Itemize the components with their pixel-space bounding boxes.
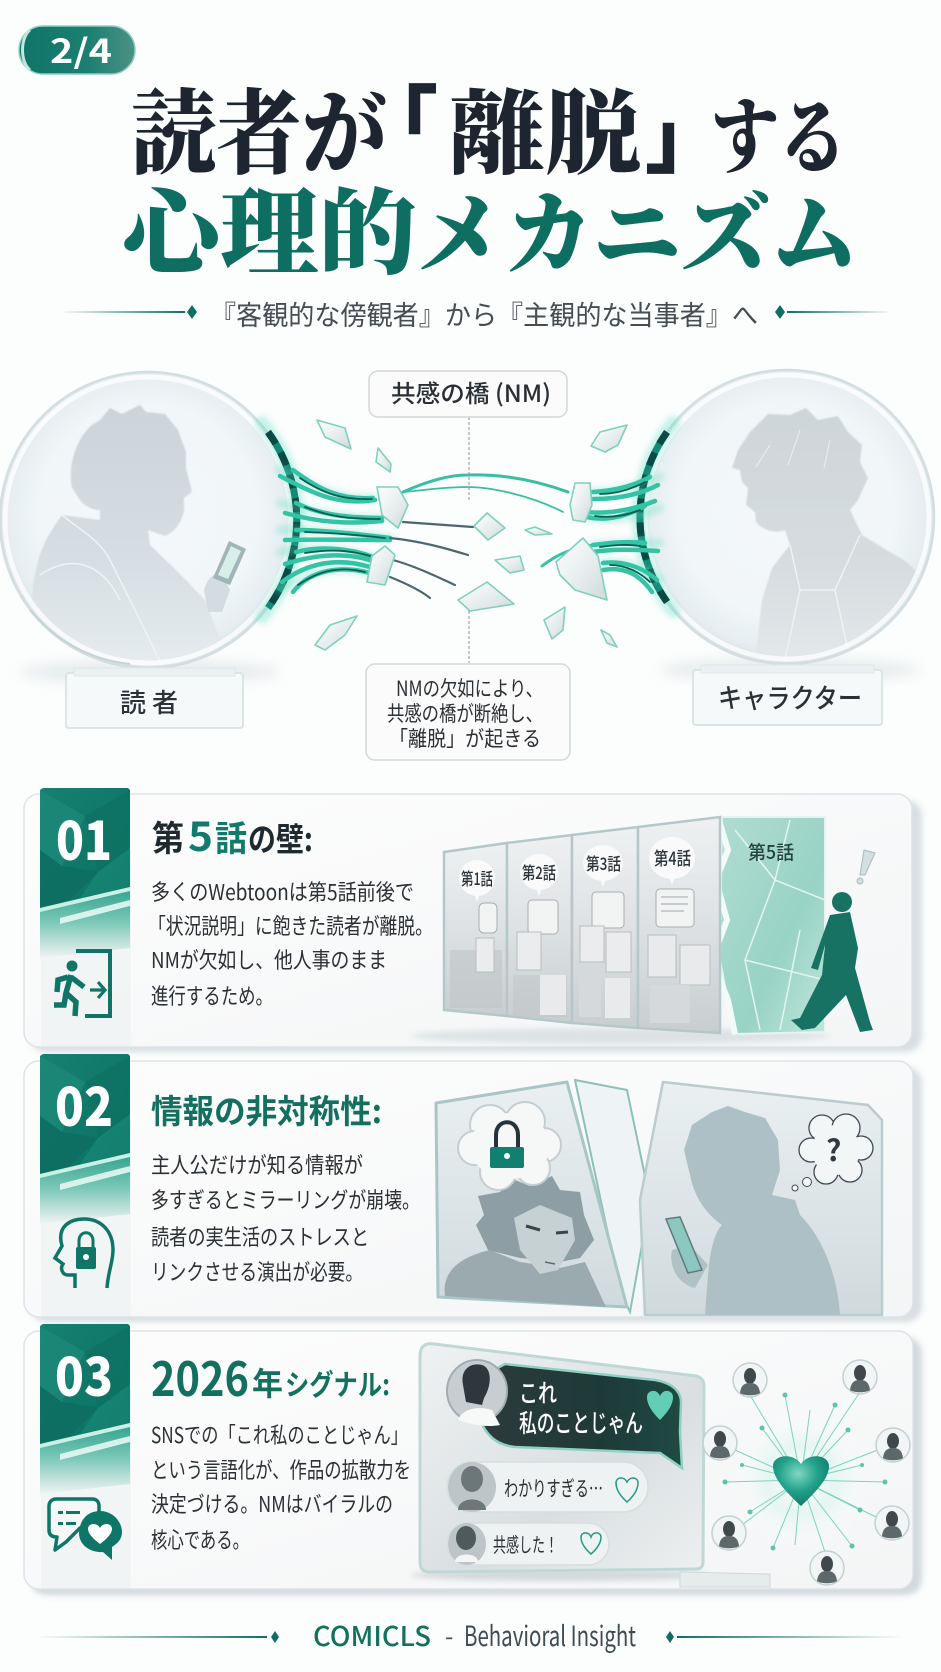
heading: 2026年シグナル: シグナル: — [285, 1362, 390, 1404]
sphere: character — [639, 369, 935, 682]
broken glass shards — [315, 420, 627, 650]
exclamation mark — [857, 850, 875, 884]
base: 読者 — [66, 668, 243, 728]
heading: 第5話の壁: 話 — [215, 811, 247, 862]
pane 1: 第1話 — [461, 865, 493, 890]
body text — [151, 1418, 411, 1555]
base: 読者: 読 者 — [120, 683, 178, 720]
footer: - — [445, 1617, 453, 1652]
number tab 03 — [40, 1324, 130, 1494]
panel 02: 情報の非対称性 — [24, 1054, 922, 1322]
panel 03: 2026年シグナル — [24, 1324, 922, 1595]
body text: リンクさせる演出が必要。 — [151, 1255, 363, 1287]
subtitle with divider lines — [60, 294, 892, 333]
icon: head with lock — [55, 1219, 113, 1288]
body text: という言語化が、作品の拡散力を — [151, 1453, 411, 1485]
footer: Behavioral Insight — [464, 1615, 636, 1655]
callout: 断絶: 「離脱」が起きる — [389, 723, 541, 753]
title: 心理的 — [122, 158, 417, 293]
dark speech bubble: 私のことじゃん — [519, 1404, 643, 1440]
center cracked shard — [575, 1080, 650, 1312]
number tab 01: 01 — [56, 800, 112, 876]
body text: 多くのWebtoonは第5話前後で — [151, 875, 414, 907]
number tab 03: 03 — [55, 1336, 113, 1412]
body text — [148, 875, 433, 1011]
sphere: reader — [0, 371, 297, 684]
pane 4 — [638, 817, 720, 1033]
pane 5 shattered: 第5話 — [748, 838, 794, 865]
callout: 断絶 — [366, 611, 570, 760]
pane 2 — [507, 835, 572, 1023]
left glass pane: protagonist — [436, 1082, 627, 1307]
thought bubble with lock — [458, 1102, 561, 1190]
base: キャラクター: キャラクター — [718, 677, 862, 716]
title: 」 — [645, 74, 725, 190]
heart — [773, 1456, 829, 1506]
dark speech bubble: これ — [519, 1374, 557, 1410]
pane 3 — [572, 827, 638, 1028]
title: する — [711, 73, 847, 190]
callout: 断絶: NMの欠如により、 — [396, 673, 543, 703]
body text: 多すぎるとミラーリングが崩壊。 — [151, 1183, 420, 1215]
heading: 2026年シグナル: 2026 — [151, 1341, 249, 1410]
chat bubble: わかりすぎる — [447, 1462, 648, 1512]
base: キャラクター — [693, 665, 882, 725]
figure walking away — [791, 892, 873, 1032]
pane 4: 第4話 — [654, 845, 691, 871]
body text: SNSでの「これ私のことじゃん」 — [151, 1418, 408, 1450]
callout: 共感の橋 — [369, 371, 567, 500]
chat bubble: 共感した — [447, 1523, 609, 1565]
chat bubble: わかりすぎる: わかりすぎる… — [504, 1473, 603, 1503]
pane 5 shattered — [712, 817, 825, 1034]
title — [122, 60, 858, 293]
body text: NMが欠如し、他人事のまま — [151, 943, 387, 975]
avatars — [703, 1360, 910, 1585]
page badge 2/4 — [19, 25, 135, 74]
silhouette: reader with phone — [32, 405, 246, 672]
heading: 2026年シグナル: 年 — [252, 1359, 283, 1405]
heading: 第5話の壁: 第 — [152, 811, 184, 862]
illustration: split glass with protagonist and reader — [436, 1080, 882, 1315]
pane 2: 第2話 — [522, 859, 556, 884]
right glass pane: reader — [640, 1082, 882, 1315]
phone — [666, 1217, 708, 1288]
heading: 第5話の壁: 5 — [188, 805, 213, 863]
heading: 第5話の壁: の壁: — [248, 813, 313, 861]
body text: 「状況説明」に飽きた読者が離脱。 — [148, 909, 433, 941]
heading: 情報の非対称性: 情報の非対称性: — [151, 1085, 382, 1133]
thought bubble with question mark: ? — [826, 1126, 841, 1170]
number tab 02 — [40, 1054, 130, 1224]
title: メカニズム — [416, 162, 858, 292]
body text: 主人公だけが知る情報が — [151, 1148, 363, 1180]
silhouette: character facing left — [732, 408, 925, 670]
body text: 進行するため。 — [151, 979, 273, 1011]
body text — [151, 1148, 420, 1287]
footer: COMICLS — [313, 1615, 431, 1654]
body text: 核心である。 — [151, 1523, 249, 1555]
dark speech bubble — [480, 1364, 682, 1468]
title: 読者が — [131, 61, 387, 193]
footer — [36, 1615, 903, 1655]
page badge 2/4: 2/4 — [50, 25, 112, 73]
body text: 読者の実生活のストレスと — [151, 1220, 369, 1252]
callout: 共感の橋: 共感の橋 (NM) — [391, 374, 551, 409]
number tab 01 — [40, 788, 130, 958]
title: 離脱 — [449, 61, 641, 193]
number tab 02: 02 — [55, 1066, 113, 1142]
callout: 断絶: 共感の橋が断絶し、 — [387, 698, 543, 728]
thought bubble with question mark — [792, 1114, 873, 1191]
heading: 2026年シグナル — [151, 1341, 390, 1410]
subtitle with divider lines: 『客観的な傍観者』から『主観的な当事者』へ — [210, 294, 758, 333]
panel 01: 第5話の壁 — [24, 788, 922, 1052]
pane 3: 第3話 — [586, 850, 621, 875]
avatar main — [447, 1360, 507, 1426]
heading: 第5話の壁 — [152, 805, 313, 863]
bridge strands between spheres — [262, 423, 673, 617]
title: 「 — [358, 60, 438, 176]
illustration: glass panes episodes 1-5 — [410, 817, 875, 1044]
pane 1 — [444, 843, 507, 1016]
icon: exit door with runner — [54, 951, 110, 1016]
icon: chat bubbles with heart — [49, 1499, 122, 1560]
chat bubble: 共感した: 共感した！ — [493, 1529, 558, 1558]
illustration: chat on glass panel — [410, 1344, 770, 1587]
body text: 決定づける。NMはバイラルの — [151, 1487, 393, 1519]
illustration: heart network — [703, 1360, 910, 1585]
